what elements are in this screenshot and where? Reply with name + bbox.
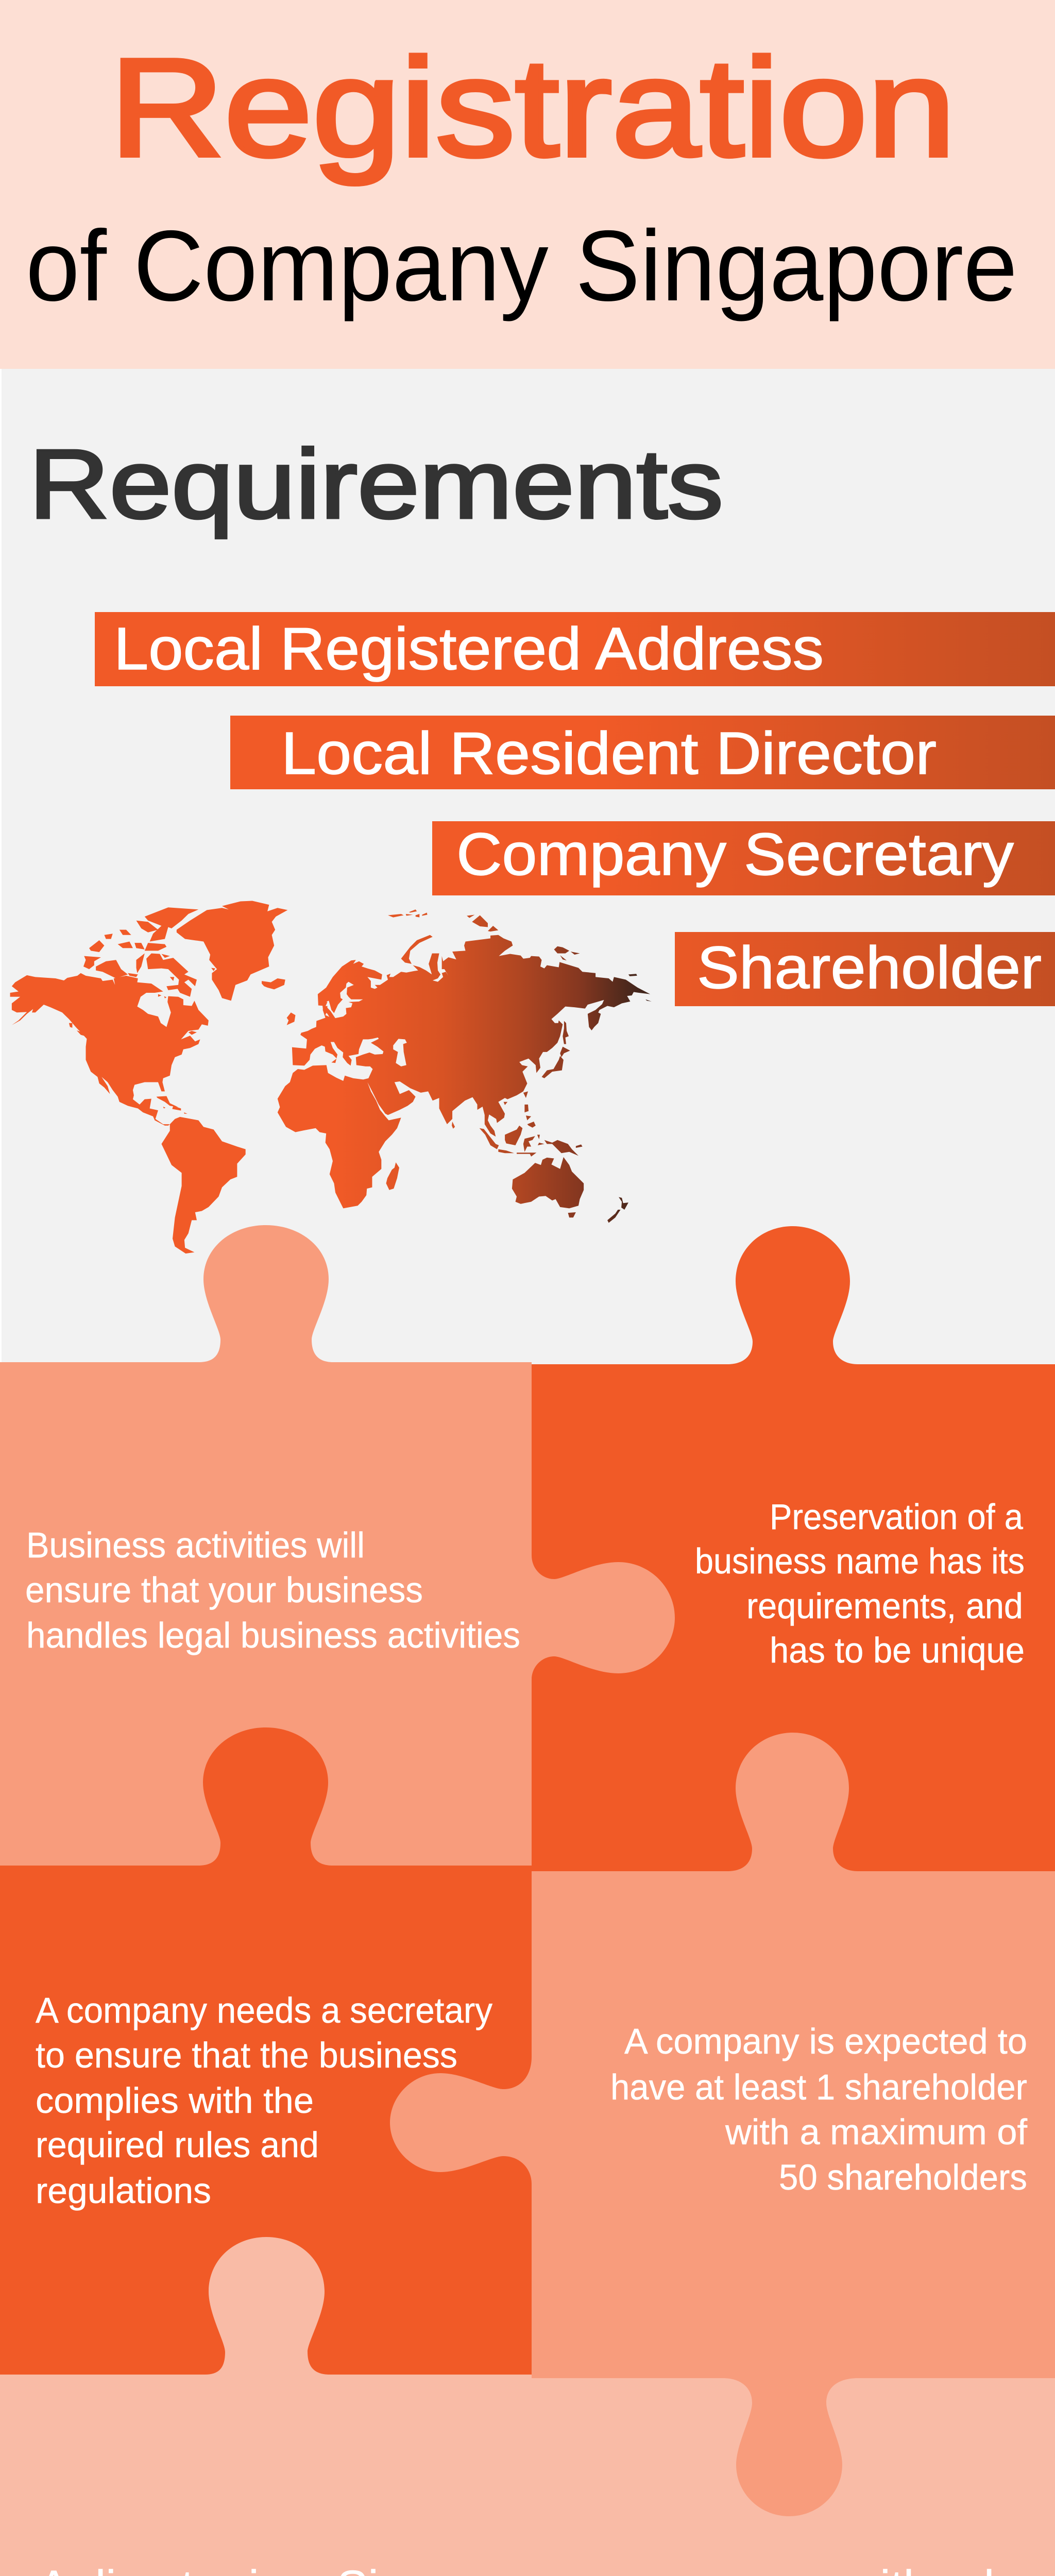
text block: preservation of a business name: requirements, and [746,1586,1023,1626]
text block: company secretary [36,1990,492,2211]
puzzle piece: shareholders (middle right) [390,1733,1055,2516]
text block: business activities: Business activities will [26,1525,365,1565]
bar: Shareholder: Shareholder [697,934,1042,1001]
bar: Local Registered Address [95,612,1055,686]
text block: preservation of a business name: Preservation of a [770,1497,1023,1537]
text block: company secretary: required rules and [36,2125,319,2165]
text block: company secretary: regulations [36,2171,211,2211]
heading: Requirements: Requirements [29,430,723,539]
map: Americas and Greenland [10,901,287,1253]
text block: preservation of a business name: has to be unique [770,1630,1025,1670]
text block: shareholders: 50 shareholders [779,2157,1027,2197]
title: Registration: Registration [110,30,956,186]
subtitle: of Company Singapore: of Company Singapore [26,210,1017,322]
text block: business activities [25,1525,520,1655]
text block: preservation of a business name: business name has its [695,1541,1025,1581]
bar: Company Secretary: Company Secretary [456,821,1014,888]
panel: title band [0,0,1055,369]
map: Eurasia, Africa and Oceania [278,909,652,1223]
text block: business activities: handles legal business activities [26,1615,520,1655]
text block: company secretary: complies with the [36,2080,314,2121]
bar: Local Registered Address: Local Registered Address [114,615,824,682]
text block: company secretary: to ensure that the business [36,2035,457,2075]
puzzle piece: business activities (top left) [0,1225,675,1866]
text block: business activities: ensure that your business [25,1570,423,1610]
text block: shareholders: have at least 1 shareholder [610,2067,1027,2107]
text block: shareholders: A company is expected to [624,2021,1027,2061]
puzzle piece: director (bottom, full width) [0,2237,1055,2576]
text block: preservation of a business name [695,1497,1025,1670]
bar: Local Resident Director [230,716,1055,789]
puzzle piece: secretary (middle left) [0,1727,532,2375]
puzzle piece: preservation of business name (top right) [532,1226,1055,1871]
bar: Local Resident Director: Local Resident Director [281,720,937,787]
text block: shareholders: with a maximum of [725,2112,1028,2152]
text block: company secretary: A company needs a secretary [36,1990,492,2030]
world map [10,901,652,1253]
text block: shareholders [610,2021,1028,2197]
